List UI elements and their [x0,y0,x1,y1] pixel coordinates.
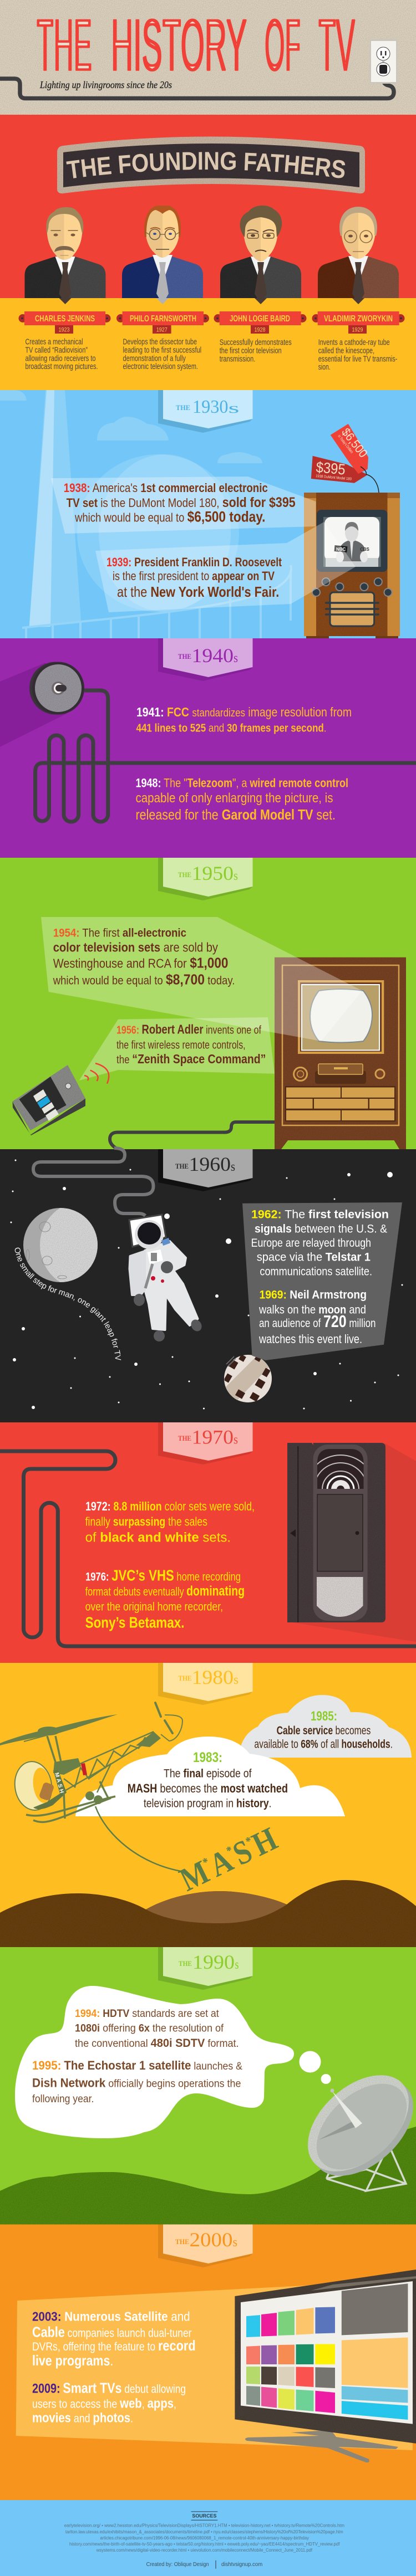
banner: the 1930s [158,390,253,433]
text: 1995 [32,2058,242,2105]
sources list: history.com/news/the-birth-of-satellite-tv-50-years-ago • telstar50.org/history.html • eeweb.poly.edu/~yao/EE4414/spectrum_HDTV_review.pdf [69,2542,340,2547]
text: 1939: at the New York World's Fair. [117,583,279,600]
icon: helicopter: MASH [53,1772,65,1794]
heading: the founding fathers ribbon [57,136,365,194]
panel: 1930s [0,390,416,639]
text: 1976: Sony’s Betamax. [85,1614,184,1631]
hills [0,1880,416,1947]
title: OF [265,4,301,85]
bio: Philo Farnsworth: electronic television system. [123,362,198,371]
heading: the founding fathers ribbon: THE FOUNDING FATHERS [66,152,345,178]
bio: Charles Jenkins [19,311,111,371]
panel: 1990s [0,1947,416,2225]
text: 1948: capable of only enlarging the picture, is [135,791,333,806]
callout: 1985 cloud: available to 68% of all households. [254,1738,393,1750]
tagline: Lighting up livingrooms since the 20s [39,79,172,90]
banner: the 1980s [158,1663,253,1705]
bio: Philo Farnsworth [116,311,209,371]
banner: the 1930s: THE [176,403,190,412]
icon: price tags: $395 [315,459,346,478]
text: 1956: the first wireless remote controls, [116,1039,246,1051]
text: 2003: 2003: Numerous Satellite and [32,2309,190,2323]
banner: the 2000s: s [233,2235,237,2250]
bio: Philo Farnsworth: 1927 [156,327,168,334]
text: 1994 [75,2008,239,2050]
panel: 1960s [0,1146,416,1422]
text: 1962: signals between the U.S. & [255,1222,387,1235]
panel: 2000s [0,2224,416,2500]
callout: 1983 cloud: The final episode of [164,1767,252,1780]
text: 1954: which would be equal to $8,700 today. [53,971,235,988]
bio: John Logie Baird: 1928 [254,327,265,334]
banner: the 1970s: THE [178,1434,191,1442]
light beams [41,917,362,1080]
icon: wall outlet [369,39,398,84]
panel: header: TV [318,4,355,85]
bio: Charles Jenkins: Creates a mechanical [26,338,83,347]
towed banner: M*A*S*H: * [243,1834,254,1848]
banner: the 1980s: 1980 [192,1666,234,1688]
icon: helicopter [0,1703,184,1872]
banner: the 1970s [158,1422,253,1464]
towed banner: M*A*S*H: * [224,1843,235,1858]
banner: the 1990s: 1990 [192,1951,235,1973]
banner: the 1990s: THE [179,1959,192,1968]
banner: the 2000s: THE [175,2237,189,2246]
icon: power cord [0,71,394,99]
banner: the 1940s: THE [178,652,191,660]
callout: 1985 cloud [239,1695,412,1758]
banner: the 1960s: 1960 [189,1153,231,1175]
portrait: Philo Farnsworth [122,206,203,304]
light beams [51,477,356,612]
text: 1939: 1939: President Franklin D. Roosevelt [106,555,282,569]
stars [10,1159,403,1410]
bio: Vladimir Zworykin: sion. [318,363,331,372]
icon: telezoom reel [29,662,84,715]
text: 2009: movies and photos. [32,2410,133,2425]
text: 1994: 1994: HDTV standards are set at [75,2008,219,2020]
callout: 1983 cloud [75,1737,345,1816]
app tiles [246,2307,335,2413]
banner: the 1930s: 1930 [192,397,229,417]
panel: callout box [242,1202,402,1360]
text: 1956 [116,1022,266,1066]
credits: dishtvsignup.com [221,2561,262,2568]
text: 1954 [53,926,235,988]
text: 1995: Dish Network officially begins operations the [32,2076,241,2090]
icon: remote control [12,1063,109,1135]
banner: the 1950s: 1950 [192,862,234,884]
text: 1969: 1969: Neil Armstrong [260,1288,367,1301]
icon: telstar satellite [224,1355,272,1402]
bio: John Logie Baird: Successfully demonstrates [220,338,292,347]
icon: telezoom wire [35,690,416,822]
bio: John Logie Baird: JOHN LOGIE BAIRD [230,314,290,324]
hill [0,2127,416,2225]
text: 1962 [251,1208,389,1278]
bio: John Logie Baird [214,311,306,363]
towed banner: M*A*S*H: A [204,1842,239,1884]
icon: price tags [311,424,379,493]
banner: the 1960s: s [231,1160,235,1174]
text: 1962: 1962: The first television [251,1208,389,1221]
icon: color television console [275,957,406,1149]
icon: astronaut [129,1215,204,1341]
text: 1969: an audience of 720 million [259,1312,376,1331]
bio: Vladimir Zworykin: Invents a cathode-ray tube [318,338,390,347]
text: 2009 [32,2380,186,2425]
banner: the 1980s: s [234,1673,239,1687]
text: 1941: 1941: FCC standardizes image resolution from [136,705,352,719]
banner: the 1960s: THE [175,1162,189,1170]
panel: header [0,0,416,115]
bio: John Logie Baird: the first color television [220,347,282,356]
bio: Philo Farnsworth: PHILO FARNSWORTH [130,314,196,324]
text: 1954: Westinghouse and RCA for $1,000 [53,955,228,971]
bio: Charles Jenkins: allowing radio receivers to [26,355,95,363]
text: 1972 [85,1499,255,1545]
callout: 1983 cloud: television program in history. [144,1797,272,1810]
banner: the 1970s: s [234,1433,238,1447]
icon: flat screen smart TV [235,2270,416,2444]
light beam [16,2278,413,2450]
bio: Charles Jenkins: CHARLES JENKINS [35,314,95,324]
text: 1948: released for the Garod Model TV set. [135,806,336,823]
portrait: Vladimir Zworykin [318,207,399,304]
banner: the 1980s: THE [179,1674,192,1682]
text: 1956: the “Zenith Space Command” [116,1052,266,1066]
text: 1976: over the original home recorder, [85,1601,223,1614]
callout: 1985 cloud: 1985: [311,1709,337,1724]
panel: founders bios [0,298,416,390]
icon: price tags: in Today's Dollars [337,434,354,454]
banner: the 1970s: 1970 [192,1426,234,1448]
banner: the 1950s: THE [178,870,191,879]
sources list: tarlton.law.utexas.edu/exhibits/mason_&_associates/documents/timeline.pdf • nyu.edu/classes/stephens/History%20of%20Television%20page.htm [65,2529,343,2534]
text: 2003: Cable companies launch dual-tuner [32,2323,192,2340]
bio: Vladimir Zworykin: called the kinescope, [318,347,374,356]
text: 1954: color television sets are sold by [53,940,218,954]
panel: the founding fathers [0,115,416,298]
text: 1956: 1956: Robert Adler invents one of [116,1022,261,1036]
bio: Charles Jenkins: broadcast moving pictures. [26,362,98,371]
bio: Vladimir Zworykin: 1929 [352,327,363,334]
sources list [64,2523,344,2553]
shadow of cassette [287,1443,416,1642]
text: 1948: 1948: The "Telezoom", a wired remote control [135,776,348,790]
sources list: wsystems.com/news/digital-video-recorder.html • uievolution.com/mobileconnect/Mobile_Connect_June_2011.pdf [96,2548,313,2553]
bio: Vladimir Zworykin: VLADIMIR ZWORYKIN [324,314,393,324]
text: 1939 [106,555,282,600]
portrait: John Logie Baird [220,206,301,304]
icon: vintage television set: NBC [336,547,346,552]
callout: 1985 cloud: Cable service becomes [277,1724,371,1737]
panel: 1950s [0,858,416,1149]
panel: sources footer [0,2500,416,2576]
banner: the 1990s: s [235,1958,239,1972]
towed banner: M*A*S*H: * [200,1855,211,1869]
banner: the 1950s [158,858,253,900]
tie tips [59,298,364,304]
icon: stand [245,2431,398,2462]
icon: VHS cassette [287,1443,385,1622]
text: 1994: the conventional 480i SDTV format. [75,2037,239,2050]
text: 2009: 2009: Smart TVs debut allowing [32,2380,186,2396]
text: 1976 [85,1566,245,1631]
icon: wire [0,1451,416,1646]
text: 2003 [32,2309,196,2369]
sources list: articles.chicagotribune.com/1996-06-08/news/9606080068_1_remote-control-40th-anniversary-happy-birthday [100,2536,309,2541]
bio: Charles Jenkins: TV called “Radiovision” [26,346,88,355]
text: 1954: 1954: The first all-electronic [53,926,186,940]
icon: wire to remote [110,1122,275,1149]
text: 1962: space via the Telstar 1 [257,1251,371,1264]
banner: the 1950s: s [234,869,238,883]
credits: Created by: Oblique Design [146,2561,209,2568]
content panels [342,2283,408,2420]
icon: price tags: $6,500 [339,426,371,460]
sources list: earlytelevision.org/ • www2.hesston.edu/Physics/TelevisionDisplays/HISTORY1.HTM • television-history.net • tvhistory.tv/Remote%20Controls.htm [64,2523,344,2528]
text: 1969: watches this event live. [258,1332,362,1346]
curved quote: One small step for man, one giant leap for TV [14,1248,121,1360]
text: 1941: 441 lines to 525 and 30 frames per second. [136,723,326,735]
banner: the 1960s [158,1149,253,1191]
banner: the 2000s: 2000 [190,2229,233,2251]
banner: the 2000s [158,2224,253,2267]
banner: the 1940s [158,638,253,681]
text: 1962: Europe are relayed through [251,1237,371,1249]
text: 2003: live programs. [32,2352,113,2369]
bio: Philo Farnsworth: leading to the first successful [123,346,201,355]
text: 1972: finally surpassing the sales [85,1514,207,1528]
callout: 1983 cloud: MASH becomes the most watched [128,1781,288,1795]
text: 1995: 1995: The Echostar 1 satellite launches & [32,2058,242,2072]
text: 1948 [135,776,348,823]
text: 2003: DVRs, offering the feature to record [32,2337,196,2354]
text: 1969 [258,1288,376,1346]
text: 1972: 1972: 8.8 million color sets were sold, [85,1499,255,1513]
icon: price tags: 1938 DuMont Model 180 [316,474,352,482]
text: 1938: which would be equal to $6,500 today. [74,509,265,525]
panel: 1940s [0,638,416,858]
text: 1938: TV set is the DuMont Model 180, sold for $395 [67,495,296,510]
title: THE [37,4,92,85]
panel: 1970s [0,1422,416,1663]
icon: satellite dish [290,2056,416,2195]
bio: Vladimir Zworykin [312,311,405,372]
text: 1938: 1938: America's 1st commercial electronic [64,481,268,495]
icon: vintage television set: CBS [360,547,370,552]
bio: Charles Jenkins: 1923 [59,327,70,334]
callout: 1983 cloud: 1983: [193,1750,222,1765]
text: 1962: communications satellite. [260,1265,372,1278]
text: 1939: is the first president to appear on TV [113,569,275,583]
banner: the 1930s: s [229,400,240,416]
shadow of reel [0,663,67,747]
bio: John Logie Baird: transmission. [220,355,255,363]
icon: moon [23,1208,98,1282]
heading: sources [191,2512,217,2520]
text: 1941 [136,705,352,735]
icon: vintage television set [304,493,400,639]
towed banner: M*A*S*H: S [227,1832,258,1872]
heading: sources: SOURCES [192,2513,216,2519]
text: 1976: format debuts eventually dominating [85,1583,245,1599]
portrait: Charles Jenkins [24,207,105,304]
text: 2009: users to access the web, apps, [32,2396,176,2411]
text: 1994: 1080i offering 6x the resolution of [75,2022,224,2034]
text: 1938 [64,481,296,525]
icon: tether cable [33,1148,153,1216]
text: 1969: walks on the moon and [258,1304,366,1317]
bio: Philo Farnsworth: demonstration of a fully [123,355,186,363]
background: world's fair [0,390,291,638]
bio: Philo Farnsworth: Develops the dissector tube [123,338,197,347]
credits [146,2560,262,2569]
panel: 1980s [0,1663,416,1947]
text: 1995: following year. [32,2093,94,2105]
text: 1972: of black and white sets. [85,1530,231,1545]
towed banner: M*A*S*H: M [174,1852,219,1898]
callout: thought bubble [15,1986,331,2138]
title [37,4,355,85]
text: 1976: 1976: JVC’s VHS home recording [85,1566,241,1584]
banner: the 1940s: s [234,651,238,665]
banner: the 1990s [158,1947,253,1990]
banner: the 1940s: 1940 [192,644,234,667]
towed banner: M*A*S*H: H [246,1820,283,1863]
